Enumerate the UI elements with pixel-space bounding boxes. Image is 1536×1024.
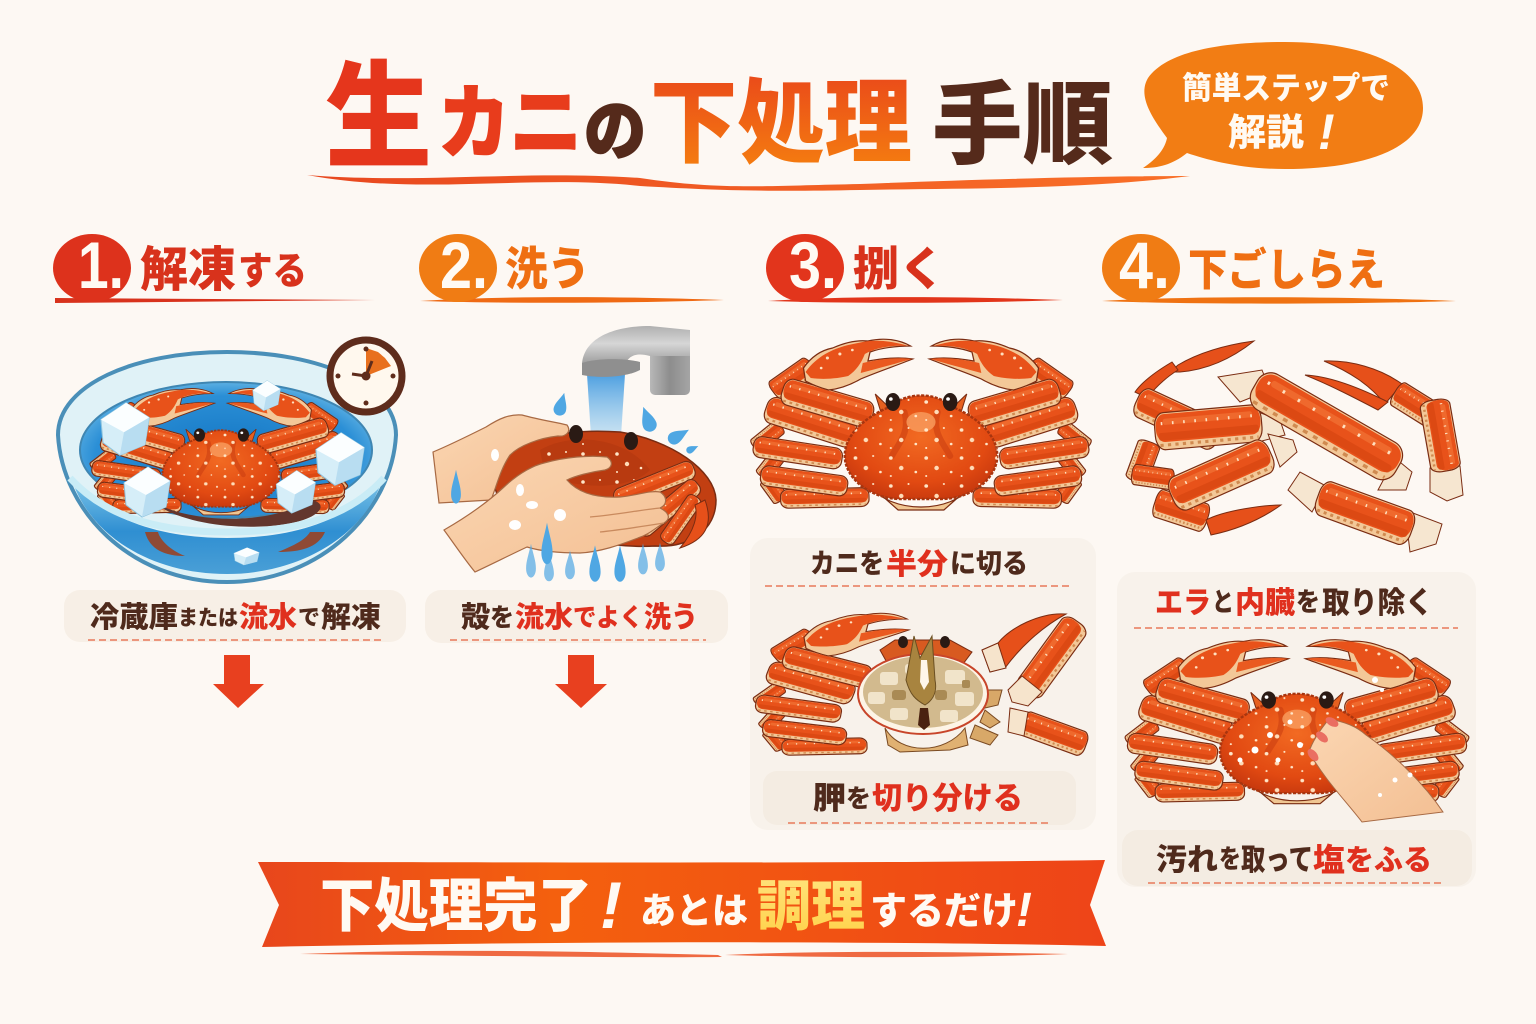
step 3 caption: separate legs: 切り分ける bbox=[872, 781, 1023, 816]
step 3 caption: separate legs bbox=[763, 771, 1076, 825]
speech bubble: ! bbox=[1318, 104, 1335, 160]
illustration: open shell bbox=[858, 636, 1002, 752]
banner: するだけ bbox=[870, 891, 1018, 933]
step 3 heading: 3. bbox=[789, 228, 837, 302]
step 3 caption: separate legs: を bbox=[846, 785, 871, 813]
step 2 caption bbox=[425, 590, 728, 643]
banner: あとは bbox=[640, 890, 748, 931]
step 1 caption: 流水 bbox=[239, 601, 297, 634]
step 3 caption: cut in half: 半分 bbox=[886, 548, 948, 581]
step 1 caption: または bbox=[178, 607, 238, 630]
banner underline bbox=[300, 951, 1068, 957]
illustration: cleaning crab bbox=[1123, 640, 1471, 804]
speech bubble bbox=[1143, 42, 1423, 169]
right claw leg bbox=[1305, 361, 1463, 501]
illustration: cut claw pieces bbox=[982, 613, 1090, 757]
step 3 heading: 捌く bbox=[853, 243, 945, 295]
step 4 caption: remove gills bbox=[1134, 587, 1458, 628]
step 4 caption: salt: 取って bbox=[1241, 844, 1313, 877]
step 4 heading: 下ごしらえ bbox=[1188, 245, 1385, 295]
step 1 caption: で bbox=[298, 605, 320, 630]
step 4 heading bbox=[1102, 228, 1456, 304]
banner bbox=[258, 860, 1106, 947]
speech bubble: 簡単ステップで bbox=[1182, 71, 1390, 106]
title bbox=[325, 54, 1113, 182]
title: 下処理 bbox=[650, 73, 912, 175]
panel: step 3 bbox=[750, 538, 1096, 830]
step 1 caption bbox=[64, 590, 406, 642]
illustration: crab in ice water bowl bbox=[58, 352, 396, 582]
step 4 caption: salt: 塩 bbox=[1313, 842, 1345, 878]
step 2 caption: を bbox=[490, 604, 514, 632]
step 2 caption: 殻 bbox=[461, 601, 490, 634]
step 2 heading bbox=[419, 228, 724, 303]
icon: crab in water bbox=[89, 389, 353, 515]
step 4 heading: 4. bbox=[1119, 228, 1170, 302]
step 3 caption: cut in half: に切る bbox=[950, 549, 1028, 579]
step 4 caption: salt bbox=[1122, 830, 1472, 886]
icon: clock bbox=[330, 340, 402, 412]
illustration: washing crab under faucet bbox=[433, 326, 716, 582]
arrow: step 1 to next bbox=[213, 655, 264, 708]
banner: ! bbox=[1016, 884, 1032, 937]
step 4 caption: remove gills: エラ bbox=[1155, 587, 1211, 620]
step 3 caption: separate legs: 胛 bbox=[813, 781, 846, 816]
step 3 caption: cut in half bbox=[765, 548, 1073, 586]
step 1 heading: 1. bbox=[78, 228, 124, 302]
icon: back hand bbox=[433, 415, 569, 503]
title: 手順 bbox=[932, 76, 1113, 176]
step 2 caption: 流水 bbox=[515, 601, 573, 634]
step 1 heading bbox=[53, 228, 375, 303]
title: の bbox=[584, 94, 646, 168]
step 2 heading: 洗う bbox=[505, 243, 590, 295]
illustration: crab left half with open shell bbox=[752, 613, 909, 755]
lower water body bbox=[72, 480, 382, 574]
step 4 caption: salt: を bbox=[1219, 844, 1241, 874]
arrow: step 2 to next bbox=[555, 655, 607, 708]
leg piece 4 bbox=[1288, 472, 1442, 552]
panel: step 4 bbox=[1117, 572, 1476, 887]
leg piece 3: large bbox=[1218, 367, 1412, 490]
illustration: whole crab bbox=[749, 339, 1093, 510]
title: カニ bbox=[438, 79, 582, 168]
step 1 heading: する bbox=[238, 251, 307, 293]
step 2 heading: 2. bbox=[440, 228, 488, 302]
leg piece 2 bbox=[1165, 434, 1297, 513]
speech bubble: 解説 bbox=[1228, 112, 1304, 153]
icon: front hand bbox=[444, 456, 668, 572]
step 1 caption: 冷蔵庫 bbox=[90, 601, 178, 634]
step 3 heading bbox=[766, 228, 1063, 303]
icon: hand with salt bbox=[1238, 677, 1443, 822]
step 4 caption: remove gills: 取り除く bbox=[1322, 587, 1433, 620]
banner: ! bbox=[600, 868, 622, 942]
step 4 caption: remove gills: を bbox=[1296, 587, 1320, 617]
step 1 caption: 解凍 bbox=[321, 601, 381, 634]
title: 生 bbox=[325, 54, 432, 182]
upper-left claw leg bbox=[1125, 341, 1281, 535]
step 4 caption: remove gills: と bbox=[1212, 587, 1234, 617]
step 1 heading: 解凍 bbox=[140, 244, 236, 297]
leg piece 1 bbox=[1153, 404, 1285, 451]
banner: 調理 bbox=[757, 877, 865, 937]
step 3 caption: cut in half: カニを bbox=[810, 549, 884, 579]
icon: water drops bbox=[451, 391, 700, 582]
banner: 下処理完了 bbox=[320, 874, 592, 939]
brown shadow under crab bbox=[150, 500, 321, 527]
title underline bbox=[307, 175, 1190, 191]
illustration: separated crab legs bbox=[1125, 341, 1463, 552]
step 4 caption: salt: 汚れ bbox=[1156, 844, 1218, 877]
icon: water stream bbox=[587, 374, 625, 452]
icon: crab held bbox=[494, 425, 716, 548]
step 4 caption: remove gills: 内臓 bbox=[1235, 587, 1295, 620]
icon: faucet bbox=[582, 326, 690, 395]
step 2 caption: でよく bbox=[573, 604, 643, 632]
step 2 caption: 洗う bbox=[644, 601, 698, 634]
step 4 caption: salt: をふる bbox=[1345, 845, 1432, 877]
ice cubes bbox=[101, 381, 364, 565]
